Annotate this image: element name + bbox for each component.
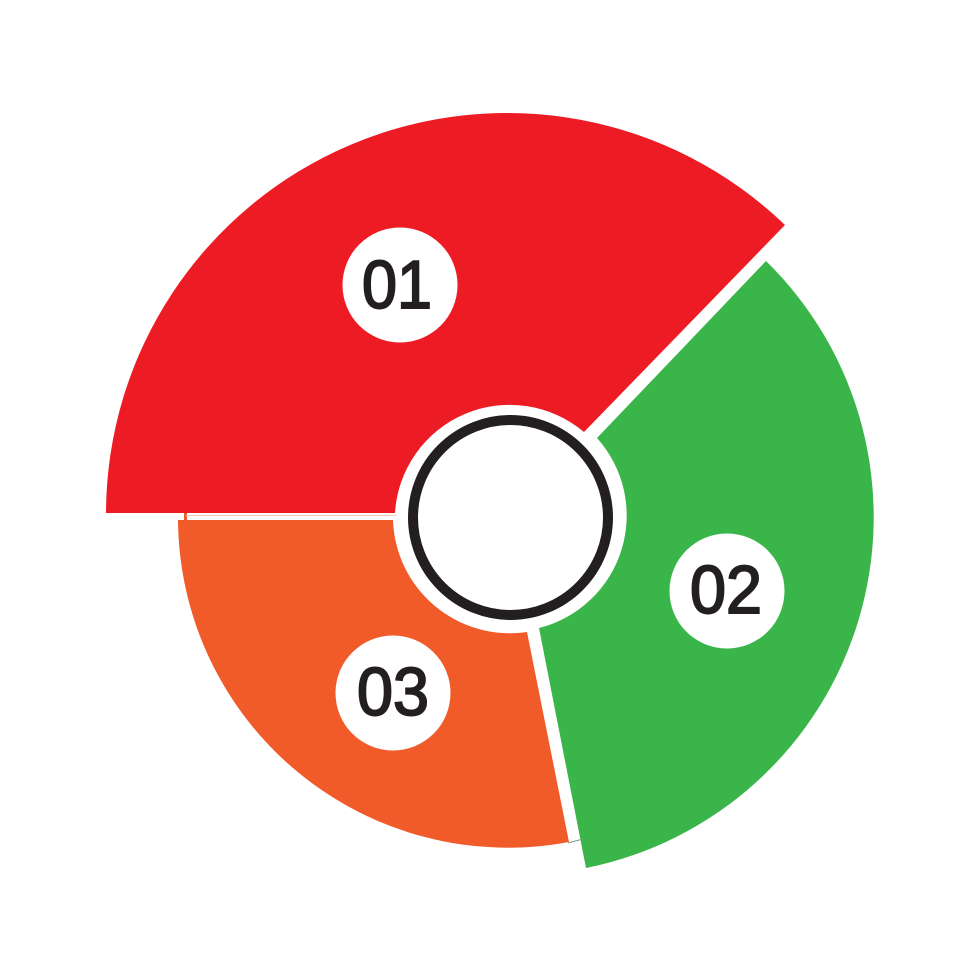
- segment 01: red: [106, 113, 785, 513]
- segment 02: green: [539, 261, 874, 868]
- center ring: [413, 420, 608, 615]
- badge 01: [342, 228, 458, 342]
- badge 02: [670, 534, 784, 648]
- badge 03: 03: [357, 654, 429, 730]
- segment 03: orange: [178, 513, 583, 848]
- badge 03: [336, 636, 450, 750]
- badge 02: 02: [690, 552, 762, 628]
- badge 01: 01: [362, 247, 432, 323]
